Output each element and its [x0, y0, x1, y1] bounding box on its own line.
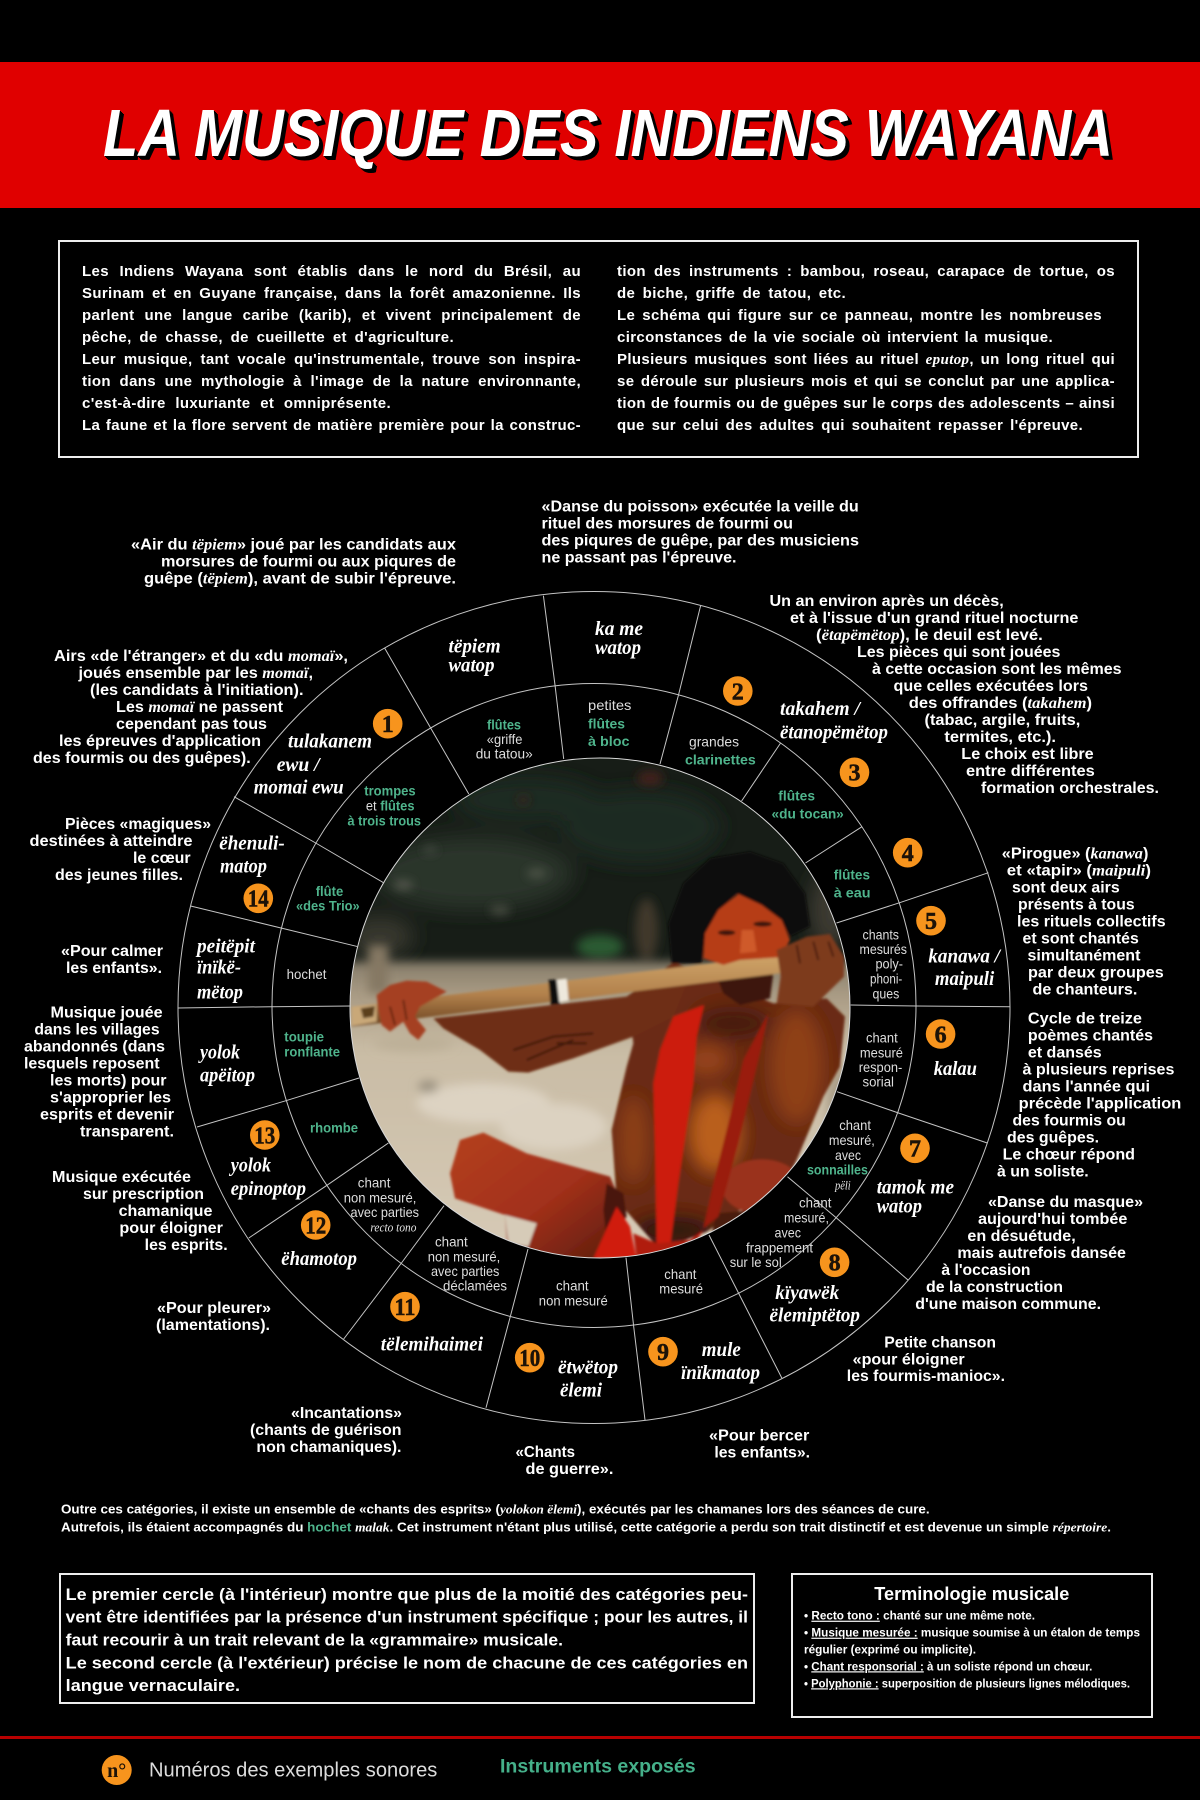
callout: musique exécutée: [52, 1169, 228, 1254]
callout: pirogue et tapir: simultanément: [1028, 947, 1140, 964]
inner ring: instruments and song types: chant: [556, 1278, 589, 1294]
knee: [724, 1158, 792, 1212]
outer ring: vernacular names: apëitop: [200, 1065, 255, 1087]
callout: danse du poisson: des piqures de guêpe, par des musiciens: [542, 533, 859, 550]
callout: musique jouée: lesquels reposent: [24, 1056, 160, 1073]
orange number badges: 14: [248, 887, 269, 913]
callout: cycle de treize poèmes: précède l'application: [1019, 1096, 1181, 1113]
legend: sound example numbers: n°: [107, 1760, 126, 1782]
intro text box: [58, 240, 1139, 458]
callout: danse du masque: mais autrefois dansée: [957, 1245, 1126, 1262]
intro text right column: tion de fourmis ou de guêpes sur le corps des adolescents – ainsi: [617, 395, 1115, 412]
inner ring: instruments and song types: flûte: [316, 884, 344, 899]
callout: air du tëpiem: «Air du tëpiem» joué par les candidats aux: [131, 536, 456, 553]
explanation text: Le second cercle (à l'extérieur) précise le nom de chacune de ces catégories en: [66, 1655, 748, 1673]
outer ring: vernacular names: matop: [220, 856, 267, 878]
inner ring: instruments and song types: avec: [835, 1147, 861, 1163]
callout: airs de l'étranger: (les candidats à l'initiation).: [90, 682, 304, 699]
explanation text: Le premier cercle (à l'intérieur) montre que plus de la moitié des catégories peu-: [66, 1586, 748, 1604]
outer ring: vernacular names: mëtop: [197, 981, 243, 1003]
callout: pour calmer: [61, 943, 163, 977]
callout: danse du masque: de la construction: [926, 1279, 1063, 1296]
callout: pour pleurer: [156, 1300, 271, 1334]
inner ring: instruments and song types: flûtes: [487, 717, 521, 732]
callout: airs de l'étranger: les épreuves d'application: [59, 733, 261, 750]
callout: un an environ: que celles exécutées lors: [894, 678, 1088, 695]
photo: Wayana man playing a long flute: [350, 758, 850, 1258]
callout: cycle de treize poèmes: dans l'année qui: [1022, 1079, 1150, 1096]
callout: petite chanson: «pour éloigner: [853, 1351, 965, 1368]
inner ring: instruments and song types: avec parties: [350, 1204, 419, 1220]
intro text left column: La faune et la flore servent de matière première pour la construc-: [82, 417, 581, 434]
terminology content: • Chant responsorial : à un soliste répond un chœur.: [804, 1659, 1092, 1673]
callout: cycle de treize poèmes: des guêpes.: [1007, 1130, 1099, 1147]
inner ring: instruments and song types: à trois trous: [348, 813, 421, 828]
callout: un an environ: Les pièces qui sont jouées: [857, 644, 1060, 661]
callout: airs de l'étranger: Les momaï ne passent: [116, 699, 283, 716]
inner ring: instruments and song types: à bloc: [588, 734, 630, 749]
callout: chants de guerre: «Chants: [516, 1444, 575, 1461]
callout: pour pleurer: «Pour pleurer»: [157, 1300, 271, 1317]
callout: airs de l'étranger: Airs «de l'étranger» et du «du momaï»,: [54, 648, 348, 665]
callout: incantations: non chamaniques).: [256, 1439, 402, 1456]
outer ring: vernacular names: takahem /: [780, 698, 862, 720]
outer ring: vernacular names: ïnïkë-: [197, 956, 241, 978]
inner ring: instruments and song types: chants: [862, 926, 899, 942]
inner ring: instruments and song types: mesuré,: [784, 1209, 829, 1225]
terminology box: [791, 1573, 1153, 1718]
callout: cycle de treize poèmes: à plusieurs reprises: [1022, 1062, 1174, 1079]
callout: incantations: (chants de guérison: [250, 1422, 402, 1439]
leg: [450, 1133, 620, 1260]
intro text right column: circonstances de la vie sociale où intervient la musique.: [617, 329, 1053, 346]
callout: pirogue et tapir: et sont chantés: [1022, 930, 1139, 947]
explanation text: [66, 1586, 748, 1695]
callout: pour bercer: «Pour bercer: [709, 1428, 809, 1445]
orange number badges: 12: [305, 1213, 326, 1239]
callout: musique jouée: transparent.: [80, 1124, 174, 1141]
outer ring: vernacular names: tulakanem: [288, 730, 372, 752]
inner ring: instruments and song types: frappement: [746, 1239, 813, 1255]
inner ring: instruments and song types: chant: [799, 1195, 832, 1211]
outer ring: vernacular names: tamok me: [877, 1176, 954, 1198]
outer ring: vernacular names: yolok: [229, 1155, 271, 1177]
face: [703, 894, 790, 965]
inner ring: instruments and song types: non mesuré: [539, 1293, 608, 1309]
inner ring: instruments and song types: ronflante: [284, 1044, 340, 1059]
outer ring: vernacular names: [195, 618, 1002, 1402]
callout: airs de l'étranger: cependant pas tous: [116, 716, 267, 733]
inner ring: instruments and song types: trompes: [364, 784, 416, 799]
intro text left column: Leur musique, tant vocale qu'instrumentale, trouve son inspira-: [82, 351, 581, 368]
intro text left column: Les Indiens Wayana sont établis dans le nord du Brésil, au: [82, 263, 581, 280]
intro text left column: Surinam et en Guyane française, dans la forêt amazonienne. Ils: [82, 285, 581, 302]
callout: musique jouée: [24, 1005, 174, 1141]
inner ring: instruments and song types: clarinettes: [685, 752, 756, 767]
callout: pièces magiques: des jeunes filles.: [55, 867, 183, 884]
orange number badges: 2: [732, 679, 744, 705]
outer ring: vernacular names: tëlemihaimei: [381, 1334, 483, 1356]
outer ring: vernacular names: peitëpit: [195, 935, 256, 957]
inner ring: instruments and song types: du tatou»: [476, 746, 533, 762]
inner ring: instruments and song types: mesuré: [860, 1044, 903, 1060]
footnote on spirit songs: Outre ces catégories, il existe un ensemble de «chants des esprits» ( yolokon ëlemi ), exécutés par les chamanes lors des séances de cure.: [61, 1502, 930, 1516]
callout: un an environ: (ëtapëmëtop ), le deuil est levé.: [816, 627, 1043, 644]
inner ring: instruments and song types: «griffe: [487, 731, 523, 747]
inner ring: instruments and song types: [284, 697, 907, 1309]
orange number badges: 1: [382, 712, 394, 738]
callout: cycle de treize poèmes: à un soliste.: [997, 1163, 1089, 1180]
inner ring: instruments and song types: mesurés: [860, 941, 907, 957]
forearm: [433, 960, 687, 1073]
intro text right column: se déroule sur plusieurs mois et qui se conclut par une applica-: [617, 373, 1115, 390]
inner ring: instruments and song types: rhombe: [310, 1121, 358, 1136]
strings: [653, 1005, 704, 1248]
outer ring: vernacular names: ëlemiptëtop: [770, 1305, 860, 1327]
callout: cycle de treize poèmes: des fourmis ou: [1012, 1113, 1126, 1130]
callout: chants de guerre: de guerre».: [526, 1461, 613, 1478]
callout: danse du poisson: «Danse du poisson» exécutée la veille du: [542, 499, 859, 516]
orange number badges: [243, 676, 955, 1372]
callout: pirogue et tapir: les rituels collectifs: [1017, 913, 1166, 930]
callout: airs de l'étranger: [33, 648, 348, 767]
callout: pour calmer: les enfants».: [66, 960, 162, 977]
inner ring: instruments and song types: chant: [866, 1029, 898, 1045]
intro text left column: pêche, de chasse, de cueillette et d'agriculture.: [82, 329, 454, 346]
outer ring: vernacular names: watop: [595, 637, 641, 659]
left hand: [377, 981, 447, 1040]
inner ring: instruments and song types: chant: [435, 1233, 468, 1249]
explanation text: faut recourir à un trait relevant de la «grammaire» musicale.: [66, 1632, 563, 1650]
callout: un an environ: et à l'issue d'un grand rituel nocturne: [790, 610, 1079, 627]
callout: un an environ: à cette occasion sont les mêmes: [872, 661, 1122, 678]
callout: un an environ: Un an environ après un décès,: [770, 593, 1004, 610]
callout: un an environ: des offrandes ( takahem): [909, 695, 1092, 712]
orange number badges: 11: [394, 1295, 416, 1321]
callout: pirogue et tapir: «Pirogue» ( kanawa): [1002, 845, 1148, 862]
red rule: [0, 1736, 1200, 1738]
callout: danse du poisson: ne passant pas l'épreuve.: [542, 550, 736, 567]
callout: un an environ: termites, etc.).: [944, 729, 1056, 746]
inner ring: instruments and song types: déclamées: [443, 1278, 507, 1294]
callout: danse du poisson: [542, 499, 859, 567]
callout: danse du masque: à l'occasion: [941, 1262, 1030, 1279]
inner ring: instruments and song types: phoni-: [870, 970, 903, 986]
inner ring: instruments and song types: sonnailles: [807, 1162, 868, 1177]
callout: air du tëpiem: guêpe (tëpiem), avant de subir l'épreuve.: [144, 570, 456, 587]
inner ring: instruments and song types: non mesuré,: [344, 1189, 416, 1205]
intro text right column: Plusieurs musiques sont liées au rituel eputop, un long rituel qui: [617, 351, 1115, 368]
outer ring: vernacular names: kanawa /: [928, 945, 1002, 967]
outer ring: vernacular names: kïyawëk: [775, 1282, 839, 1304]
callout: un an environ: formation orchestrales.: [981, 780, 1159, 797]
callout: un an environ: entre différentes: [966, 763, 1095, 780]
intro text left column: [82, 263, 581, 434]
callout: chants de guerre: [516, 1444, 613, 1478]
orange number badges: 7: [909, 1137, 921, 1163]
callout: petite chanson: les fourmis-manioc».: [847, 1368, 1005, 1385]
intro text right column: que sur celui des adultes qui souhaitent repasser l'épreuve.: [617, 417, 1083, 434]
outer ring: vernacular names: ïnïkmatop: [681, 1362, 760, 1384]
callout: musique exécutée: les esprits.: [145, 1237, 228, 1254]
callout: musique jouée: les morts) pour: [50, 1073, 166, 1090]
outer ring: vernacular names: mule: [702, 1339, 741, 1361]
wheel circles and dividers: [178, 592, 1010, 1424]
callout: musique exécutée: sur prescription: [83, 1186, 204, 1203]
callout: pièces magiques: le cœur: [133, 850, 191, 867]
callout: danse du masque: aujourd'hui tombée: [978, 1211, 1128, 1228]
inner ring: instruments and song types: à eau: [834, 885, 871, 900]
flute: [352, 955, 780, 1027]
inner ring: instruments and song types: mesuré,: [829, 1132, 875, 1148]
callout: danse du masque: «Danse du masque»: [988, 1194, 1143, 1211]
loincloth: [593, 1207, 637, 1258]
legend: sound example numbers: Numéros des exemples sonores: [149, 1760, 437, 1782]
inner ring: instruments and song types: poly-: [876, 955, 903, 971]
outer ring: vernacular names: ka me: [595, 618, 643, 640]
orange number badges: 6: [935, 1022, 947, 1048]
inner ring: instruments and song types: flûtes: [778, 789, 815, 804]
outer ring: vernacular names: tëpiem: [448, 635, 501, 657]
callout: cycle de treize poèmes: Cycle de treize: [1028, 1011, 1142, 1028]
inner ring: instruments and song types: hochet: [287, 966, 326, 982]
intro text right column: tion des instruments : bambou, roseau, carapace de tortue, os: [617, 263, 1115, 280]
terminology content: • Musique mesurée : musique soumise à un étalon de temps: [804, 1626, 1140, 1640]
footnote on spirit songs: [61, 1502, 1111, 1534]
intro text right column: Le schéma qui figure sur ce panneau, montre les nombreuses: [617, 307, 1102, 324]
inner ring: instruments and song types: petites: [588, 697, 631, 713]
explanation text: vent être identifiées par la présence d'un instrument spécifique ; pour les autres, il: [66, 1609, 748, 1627]
terminology content: • Recto tono : chanté sur une même note.: [804, 1609, 1035, 1623]
inner ring: instruments and song types: chant: [664, 1266, 697, 1282]
orange number badges: 13: [254, 1123, 275, 1149]
callout: danse du poisson: rituel des morsures de fourmi ou: [542, 516, 793, 533]
callout: un an environ: [770, 593, 1159, 797]
callout: pirogue et tapir: [1002, 845, 1166, 998]
inner ring: instruments and song types: sur le sol: [730, 1254, 782, 1270]
callout: pièces magiques: [30, 816, 211, 884]
callout: pour bercer: les enfants».: [714, 1445, 810, 1462]
torso: [612, 963, 845, 1250]
outer ring: vernacular names: ëtanopëmëtop: [780, 721, 888, 743]
legend: exhibited instruments: Instruments exposés: [500, 1756, 696, 1777]
outer ring: vernacular names: momai ewu: [254, 776, 344, 798]
outer ring: vernacular names: ewu /: [277, 754, 322, 776]
inner ring: instruments and song types: grandes: [689, 734, 739, 750]
terminology content: régulier (exprimé ou implicite).: [804, 1643, 976, 1657]
callout: pirogue et tapir: de chanteurs.: [1032, 981, 1137, 998]
inner ring: instruments and song types: avec: [774, 1224, 801, 1240]
inner ring: instruments and song types: mesuré: [659, 1281, 703, 1297]
inner ring: instruments and song types: flûtes: [588, 716, 625, 731]
callout: un an environ: Le choix est libre: [961, 746, 1094, 763]
callout: pirogue et tapir: sont deux airs: [1012, 879, 1120, 896]
callout: cycle de treize poèmes: et dansés: [1028, 1045, 1102, 1062]
callout: pirogue et tapir: et «tapir» ( maipuli ): [1007, 862, 1151, 879]
callout: danse du masque: en désuétude,: [967, 1228, 1076, 1245]
outer ring: vernacular names: yolok: [198, 1041, 240, 1063]
callout: cycle de treize poèmes: poèmes chantés: [1028, 1028, 1153, 1045]
inner ring: instruments and song types: respon-: [859, 1059, 903, 1075]
callout: musique exécutée: chamanique: [119, 1203, 213, 1220]
inner ring: instruments and song types: non mesuré,: [428, 1248, 500, 1264]
terminology content: Terminologie musicale: [874, 1584, 1069, 1604]
orange number badges: 8: [829, 1251, 841, 1277]
right hand: [777, 934, 844, 1007]
callout: musique exécutée: Musique exécutée: [52, 1169, 191, 1186]
callout: pirogue et tapir: par deux groupes: [1028, 964, 1164, 981]
inner ring: instruments and song types: recto tono: [370, 1220, 417, 1235]
callout: air du tëpiem: [131, 536, 456, 587]
callout: musique jouée: Musique jouée: [50, 1005, 163, 1022]
callout: musique jouée: esprits et devenir: [40, 1107, 174, 1124]
inner ring: instruments and song types: toupie: [284, 1030, 324, 1045]
terminology content: • Polyphonie : superposition de plusieurs lignes mélodiques.: [804, 1676, 1130, 1690]
callout: pièces magiques: Pièces «magiques»: [65, 816, 211, 833]
inner ring: instruments and song types: flûtes: [834, 867, 870, 882]
outer ring: vernacular names: epinoptop: [231, 1178, 306, 1200]
outer ring: vernacular names: watop: [448, 655, 494, 677]
callout: pièces magiques: destinées à atteindre: [30, 833, 193, 850]
orange number badges: 9: [657, 1340, 669, 1366]
callout: airs de l'étranger: joués ensemble par les momaï,: [77, 665, 313, 682]
orange number badges: 3: [848, 761, 860, 787]
outer ring: vernacular names: ëhenuli-: [219, 832, 285, 854]
callout: pour calmer: «Pour calmer: [61, 943, 163, 960]
orange number badges: 10: [519, 1346, 540, 1372]
intro text left column: tion dans une mythologie à l'image de la nature environnante,: [82, 373, 581, 390]
callout: danse du masque: [915, 1194, 1143, 1313]
legend: sound example numbers: [102, 1755, 437, 1785]
title banner: [0, 62, 1200, 208]
explanation text: langue vernaculaire.: [66, 1677, 240, 1695]
callout: musique jouée: abandonnés (dans: [24, 1039, 165, 1056]
orange number badges: 5: [925, 909, 937, 935]
callout: air du tëpiem: morsures de fourmi ou aux piqures de: [161, 553, 456, 570]
callout: musique jouée: s'approprier les: [50, 1090, 171, 1107]
callout: musique exécutée: pour éloigner: [119, 1220, 223, 1237]
callout: pour bercer: [709, 1428, 810, 1462]
outer ring: vernacular names: ëhamotop: [281, 1248, 357, 1270]
callout: un an environ: (tabac, argile, fruits,: [924, 712, 1080, 729]
outer ring: vernacular names: maipuli: [935, 968, 995, 990]
footnote on spirit songs: Autrefois, ils étaient accompagnés du hochet malak. Cet instrument n'étant plus utilisé, cette catégorie a perdu son trait distinctif et est devenue un simple répertoire .: [61, 1520, 1111, 1534]
inner ring: instruments and song types: sorial: [862, 1074, 894, 1090]
callout: danse du masque: d'une maison commune.: [915, 1296, 1101, 1313]
inner ring: instruments and song types: «du tocan»: [772, 806, 844, 821]
bottom explanation box: [59, 1573, 755, 1704]
callout: pirogue et tapir: présents à tous: [1018, 896, 1135, 913]
callout: incantations: [250, 1405, 402, 1456]
intro text right column: [617, 263, 1115, 434]
outer ring: vernacular names: ëlemi: [560, 1380, 602, 1402]
callout: cycle de treize poèmes: Le chœur répond: [1003, 1146, 1135, 1163]
inner ring: instruments and song types: chant: [358, 1174, 391, 1190]
intro text left column: parlent une langue caribe (karib), et vivent principalement de: [82, 307, 581, 324]
callout: incantations: «Incantations»: [291, 1405, 402, 1422]
callout: airs de l'étranger: des fourmis ou des guêpes).: [33, 750, 251, 767]
orange number badges: 4: [902, 841, 914, 867]
outer ring: vernacular names: watop: [877, 1195, 922, 1217]
chin: [717, 973, 773, 1005]
callout: petite chanson: Petite chanson: [884, 1334, 996, 1351]
callout: petite chanson: [847, 1334, 1005, 1385]
callout: cycle de treize poèmes: [997, 1011, 1181, 1180]
terminology content: [804, 1584, 1140, 1690]
outer ring: vernacular names: kalau: [934, 1058, 977, 1080]
intro text right column: de biche, griffe de tatou, etc.: [617, 285, 846, 302]
callout: pour pleurer: (lamentations).: [156, 1317, 270, 1334]
inner ring: instruments and song types: chant: [839, 1117, 871, 1133]
inner ring: instruments and song types: et flûtes: [366, 798, 414, 813]
inner ring: instruments and song types: «des Trio»: [296, 899, 360, 914]
hair: [668, 852, 810, 963]
intro text left column: c'est-à-dire luxuriante et omniprésente.: [82, 395, 391, 412]
callout: musique jouée: dans les villages: [34, 1022, 160, 1039]
inner ring: instruments and song types: avec parties: [431, 1263, 499, 1279]
inner ring: instruments and song types: pëli: [834, 1177, 851, 1192]
inner ring: instruments and song types: ques: [872, 985, 899, 1001]
outer ring: vernacular names: ëtwëtop: [558, 1356, 618, 1378]
